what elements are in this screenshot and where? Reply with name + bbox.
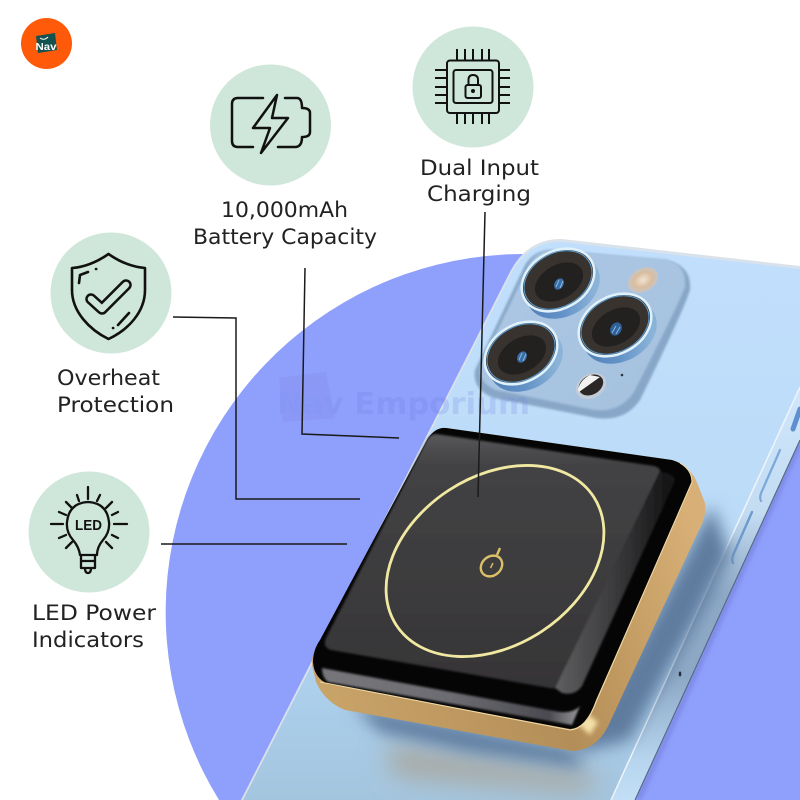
watermark text: Nav Emporium bbox=[277, 387, 530, 422]
label: Protection bbox=[57, 393, 174, 418]
glass reflection band bbox=[322, 668, 580, 725]
background circle bbox=[166, 254, 800, 800]
lens: right bbox=[567, 281, 668, 377]
icon circle bbox=[50, 232, 172, 354]
label: LED Power bbox=[32, 601, 156, 626]
icon circle bbox=[210, 64, 331, 186]
power bank shadow bbox=[352, 505, 730, 792]
power symbol bbox=[477, 548, 506, 581]
label: Battery Capacity bbox=[193, 225, 377, 250]
label: Overheat bbox=[57, 366, 160, 391]
watermark bbox=[277, 372, 530, 422]
phone side band bbox=[611, 388, 800, 800]
side dot bbox=[679, 672, 681, 676]
label: Charging bbox=[427, 182, 531, 207]
logo bbox=[21, 18, 72, 69]
glass shell bbox=[313, 428, 692, 729]
icon circle bbox=[28, 472, 150, 592]
feature: LED power indicators bbox=[28, 472, 156, 653]
logo text: Nav bbox=[36, 41, 57, 53]
line: overheat bbox=[173, 317, 360, 499]
phone bbox=[241, 239, 800, 800]
matte face bbox=[325, 434, 660, 688]
microphone dot bbox=[621, 374, 623, 376]
gold casing bbox=[312, 428, 705, 751]
phone back bbox=[243, 242, 800, 800]
line: dual input bbox=[478, 212, 485, 497]
label: Dual Input bbox=[420, 156, 539, 181]
icon: chip with lock bbox=[435, 49, 510, 124]
icon: battery with bolt bbox=[232, 95, 310, 153]
phone edge highlight bbox=[611, 387, 800, 800]
flash bbox=[623, 262, 663, 298]
camera bump shadow rim bbox=[475, 250, 690, 419]
icon text: LED bbox=[75, 518, 102, 534]
feature: overheat protection bbox=[50, 232, 174, 418]
lens: top left bbox=[510, 236, 611, 332]
icon: shield with check bbox=[72, 254, 145, 339]
camera bump bbox=[480, 250, 685, 410]
feature: dual input charging bbox=[412, 26, 539, 207]
power bank bbox=[312, 426, 730, 792]
logo circle bbox=[21, 18, 72, 69]
charging ring bbox=[350, 426, 640, 696]
label: 10,000mAh bbox=[221, 198, 348, 223]
side buttons bbox=[732, 409, 800, 563]
connector lines bbox=[161, 212, 485, 544]
label: Indicators bbox=[32, 628, 144, 653]
sensor bbox=[571, 368, 611, 404]
lens: bottom left bbox=[473, 309, 574, 405]
logo badge bbox=[36, 33, 57, 53]
gold rim lines bbox=[320, 463, 692, 730]
logo smile bbox=[40, 37, 48, 39]
line: LED bbox=[161, 543, 347, 545]
camera module bbox=[473, 236, 690, 419]
feature: battery capacity bbox=[193, 64, 377, 250]
watermark badge bbox=[279, 372, 335, 422]
icon: LED bulb bbox=[51, 487, 127, 573]
line: battery bbox=[302, 268, 399, 438]
right reflective strip bbox=[555, 472, 676, 694]
phone edge bbox=[241, 239, 800, 800]
phone shadow on background bbox=[638, 443, 800, 800]
gold corner highlight bbox=[576, 712, 598, 735]
phone outer edge line bbox=[635, 440, 800, 800]
icon circle bbox=[412, 26, 534, 148]
